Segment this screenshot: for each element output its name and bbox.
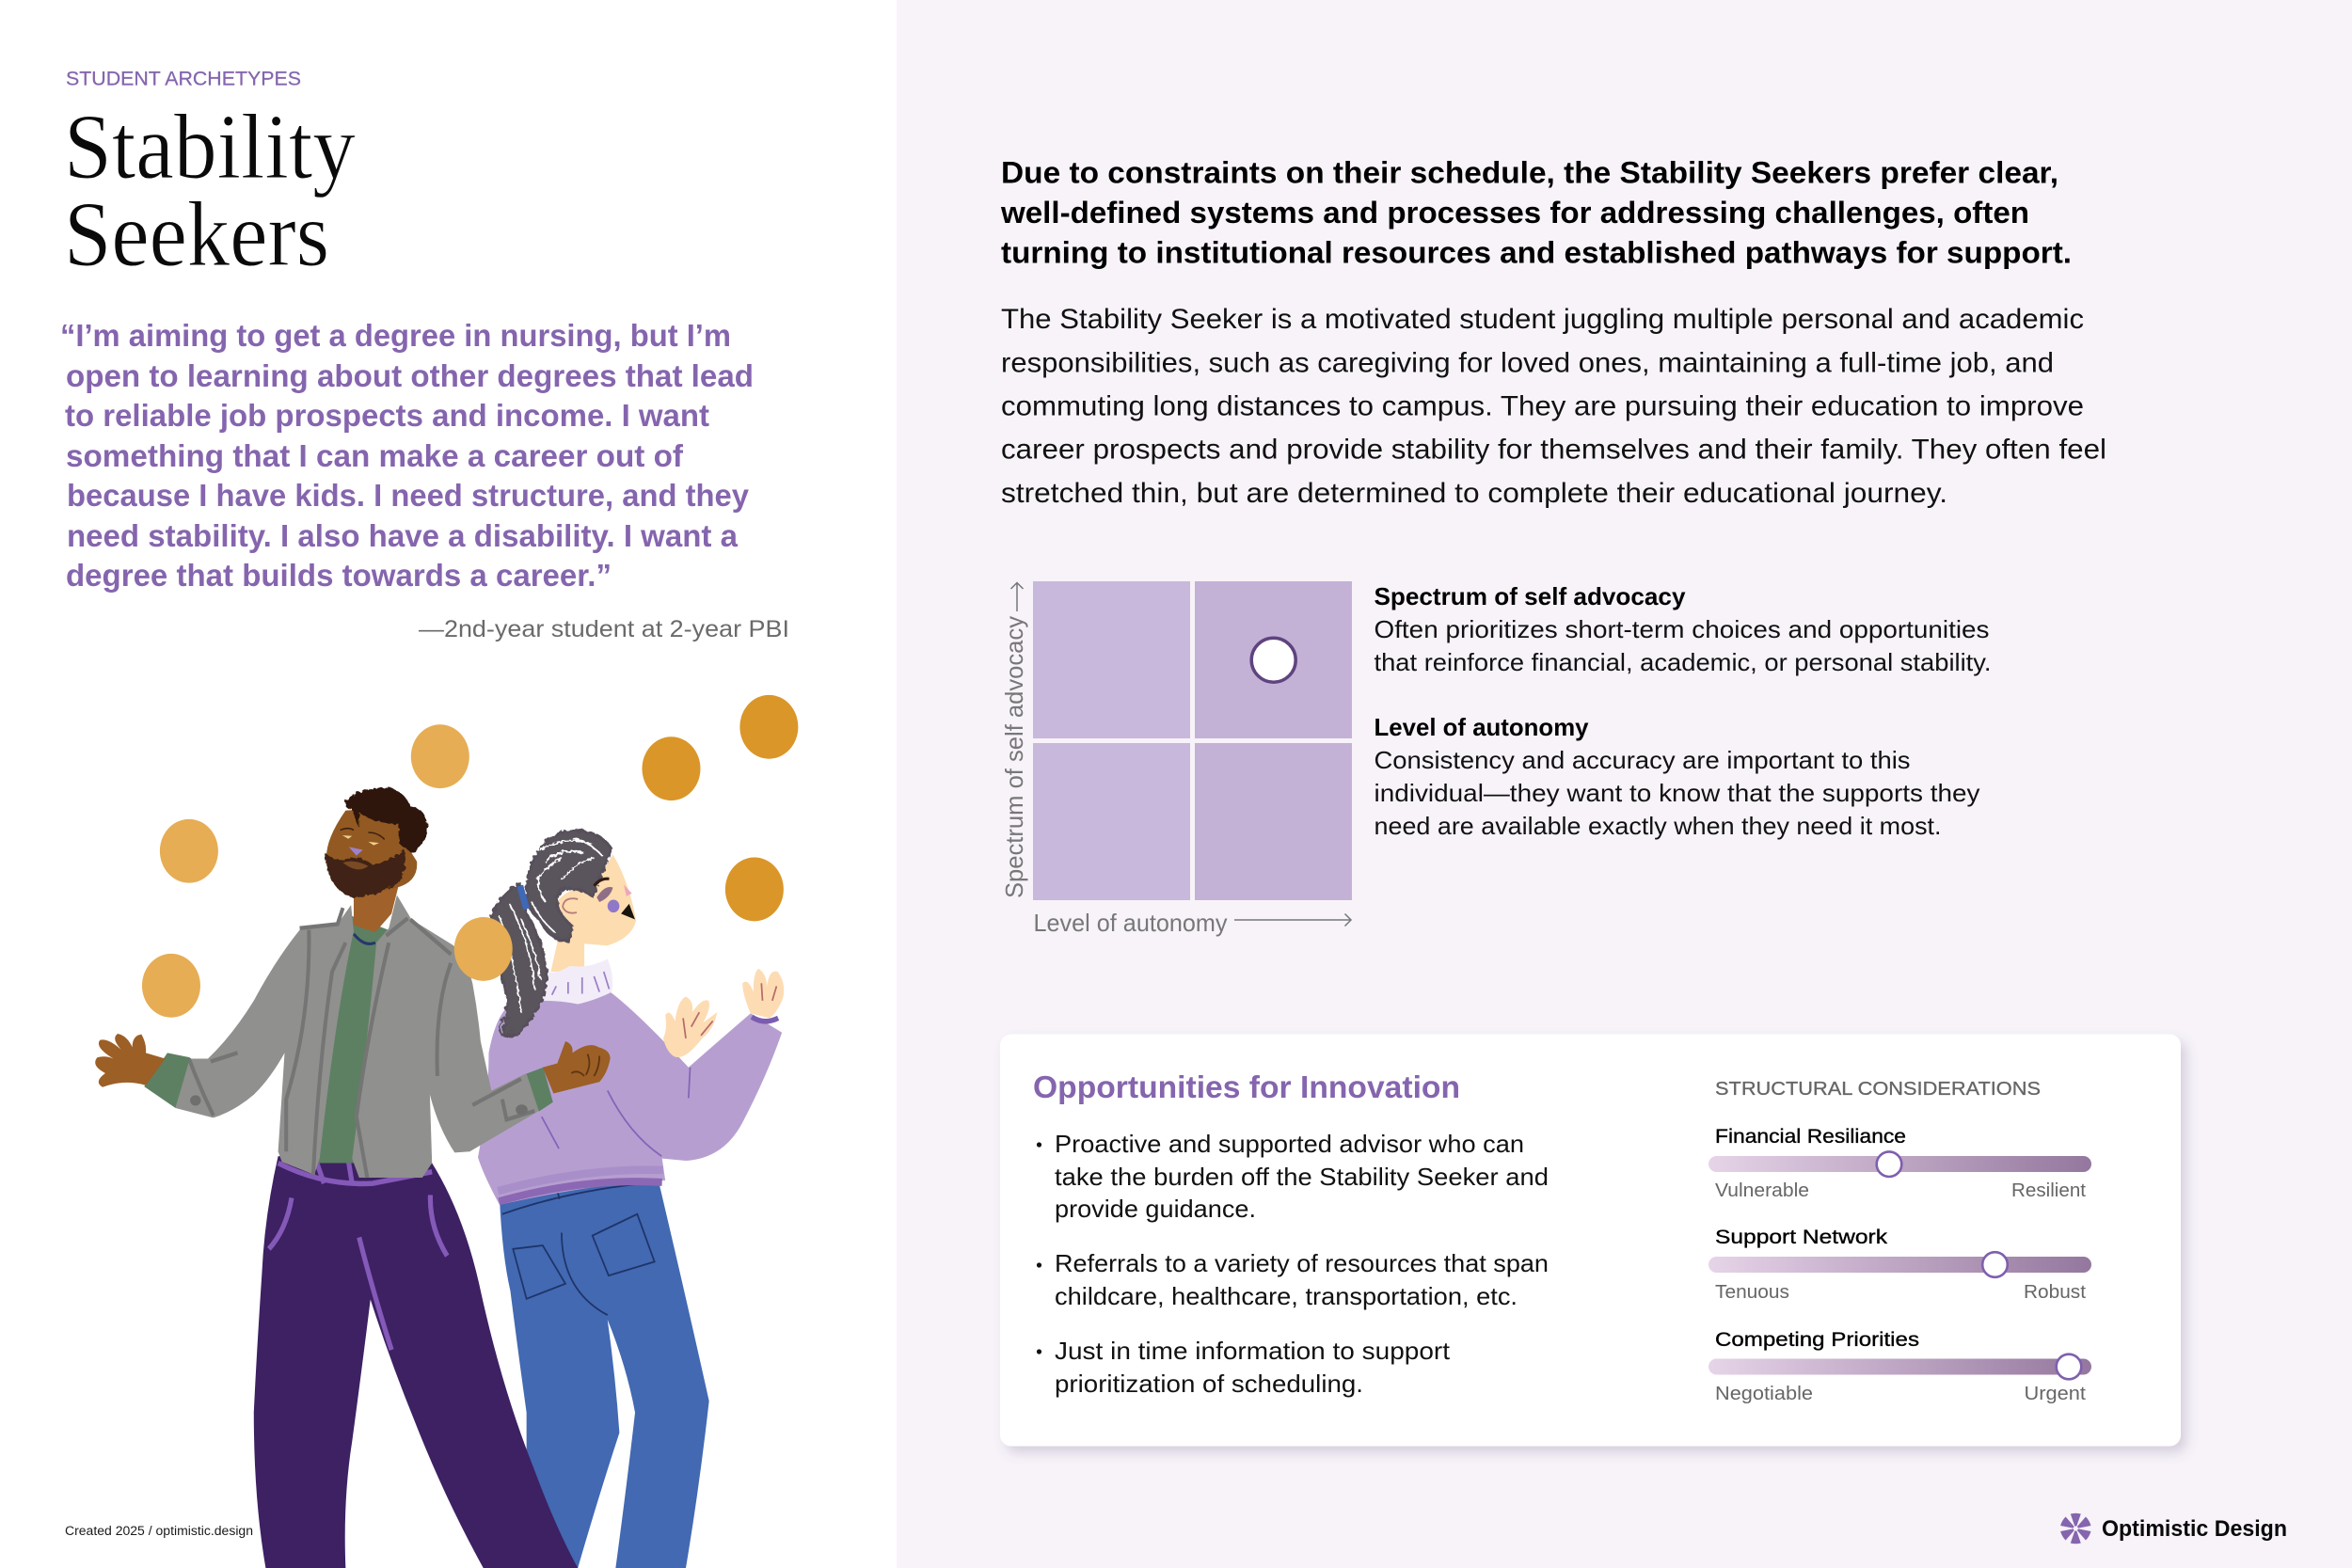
illustration: two people juggling coins: [95, 695, 798, 1568]
pull quote: something that I can make a career out of: [66, 438, 684, 473]
pull quote: degree that builds towards a career.”: [66, 558, 612, 593]
x axis arrow: [1234, 914, 1351, 926]
body paragraph: stretched thin, but are determined to complete their educational journey.: [1001, 478, 1947, 509]
slider: support network: Support Network: [1715, 1226, 1887, 1248]
chart explanations: Level of autonomy: [1374, 713, 1589, 741]
pull quote: open to learning about other degrees that lead: [66, 358, 754, 393]
chart explanations: need are available exactly when they need it most.: [1374, 812, 1942, 840]
pull quote: [60, 318, 754, 593]
quote attribution: —2nd-year student at 2-year PBI: [419, 616, 789, 642]
chart explanations: Often prioritizes short-term choices and opportunities: [1374, 615, 1989, 643]
chart explanations: individual—they want to know that the supports they: [1374, 779, 1979, 807]
sweater: [478, 992, 782, 1205]
bullet list: Proactive and supported advisor who can: [1055, 1130, 1524, 1158]
hair tie: [520, 886, 527, 909]
woman figure: [478, 831, 784, 1568]
face details: [563, 879, 635, 920]
card heading: Opportunities for Innovation: [1033, 1069, 1460, 1104]
slider: support network: Robust: [2024, 1282, 2086, 1303]
y axis arrow: [1010, 583, 1024, 611]
x axis label: Level of autonomy: [1033, 909, 1227, 937]
bullet list: provide guidance.: [1055, 1195, 1256, 1223]
slider: financial resiliance: Resilient: [2011, 1180, 2086, 1201]
slider: financial resiliance: Financial Resiliance: [1715, 1125, 1906, 1148]
panel: left column: [0, 0, 897, 1568]
slider: competing priorities: Competing Priorities: [1715, 1328, 1919, 1351]
pull quote: because I have kids. I need structure, and they: [67, 478, 750, 513]
slider: financial resiliance: Vulnerable: [1715, 1180, 1809, 1201]
man figure: [95, 787, 611, 1568]
neck and face: [550, 854, 636, 972]
body paragraph: The Stability Seeker is a motivated student juggling multiple personal and academic: [1001, 304, 2084, 335]
body paragraph: [1001, 304, 2106, 509]
lead statement: [1000, 156, 2072, 269]
body paragraph: responsibilities, such as caregiving for loved ones, maintaining a full-time job, and: [1001, 348, 2054, 378]
head: [326, 808, 417, 897]
eyebrow label: STUDENT ARCHETYPES: [66, 68, 301, 90]
slider: competing priorities: [1708, 1328, 2091, 1404]
cuffs: [144, 1053, 190, 1108]
y axis label: Spectrum of self advocacy: [1000, 616, 1028, 898]
bullet list: prioritization of scheduling.: [1055, 1370, 1363, 1398]
neck: [354, 886, 399, 932]
title: Stability: [64, 96, 356, 198]
panel: opportunities card: [1000, 1035, 2181, 1447]
hair: [490, 831, 612, 1036]
bullet list: Referrals to a variety of resources that span: [1055, 1249, 1549, 1277]
hands: [95, 1034, 166, 1087]
body paragraph: career prospects and provide stability for themselves and their family. They often feel: [1001, 435, 2106, 465]
title: [64, 96, 356, 286]
bullet list: [1037, 1130, 1549, 1398]
lead statement: well-defined systems and processes for addressing challenges, often: [1000, 196, 2029, 230]
hands: [663, 997, 717, 1057]
jeans: [500, 1178, 709, 1568]
slider: financial resiliance: [1708, 1125, 2091, 1201]
hair: [345, 787, 428, 854]
bullet list: take the burden off the Stability Seeker and: [1055, 1163, 1549, 1191]
title: Seekers: [64, 183, 329, 286]
body paragraph: commuting long distances to campus. They are pursuing their education to improve: [1001, 391, 2084, 421]
chart explanations: that reinforce financial, academic, or personal stability.: [1374, 648, 1991, 676]
credit line: Created 2025 / optimistic.design: [65, 1524, 253, 1538]
slider: competing priorities: Urgent: [2025, 1384, 2086, 1404]
chart explanations: [1374, 582, 1991, 840]
lead statement: Due to constraints on their schedule, the Stability Seekers prefer clear,: [1001, 156, 2058, 190]
pull quote: “I’m aiming to get a degree in nursing, but I’m: [60, 318, 731, 353]
slider: support network: [1708, 1226, 2091, 1303]
jacket: [176, 895, 539, 1178]
quadrant chart: [1000, 581, 1352, 937]
pull quote: need stability. I also have a disability. I want a: [67, 518, 739, 553]
chart explanations: Spectrum of self advocacy: [1374, 582, 1686, 610]
structural considerations heading: STRUCTURAL CONSIDERATIONS: [1715, 1079, 2041, 1100]
slider: support network: Tenuous: [1715, 1282, 1789, 1303]
logo: Optimistic Design: [2059, 1513, 2287, 1544]
wordmark: Optimistic Design: [2102, 1516, 2287, 1542]
coins behind: [142, 695, 798, 1018]
icon: six-petal flower: [2059, 1513, 2091, 1544]
beard: [326, 848, 405, 897]
bullet list: Just in time information to support: [1055, 1337, 1451, 1365]
shirt: [316, 913, 391, 1164]
coin in front: [454, 917, 513, 981]
chart explanations: Consistency and accuracy are important to this: [1374, 746, 1910, 774]
slider: competing priorities: Negotiable: [1715, 1384, 1813, 1404]
face details: [341, 829, 385, 856]
pull quote: to reliable job prospects and income. I want: [65, 398, 709, 433]
lead statement: turning to institutional resources and established pathways for support.: [1001, 235, 2072, 269]
collar: [543, 958, 612, 1005]
bullet list: childcare, healthcare, transportation, etc.: [1055, 1282, 1518, 1310]
trousers: [254, 1156, 578, 1568]
position marker: [1251, 638, 1295, 682]
